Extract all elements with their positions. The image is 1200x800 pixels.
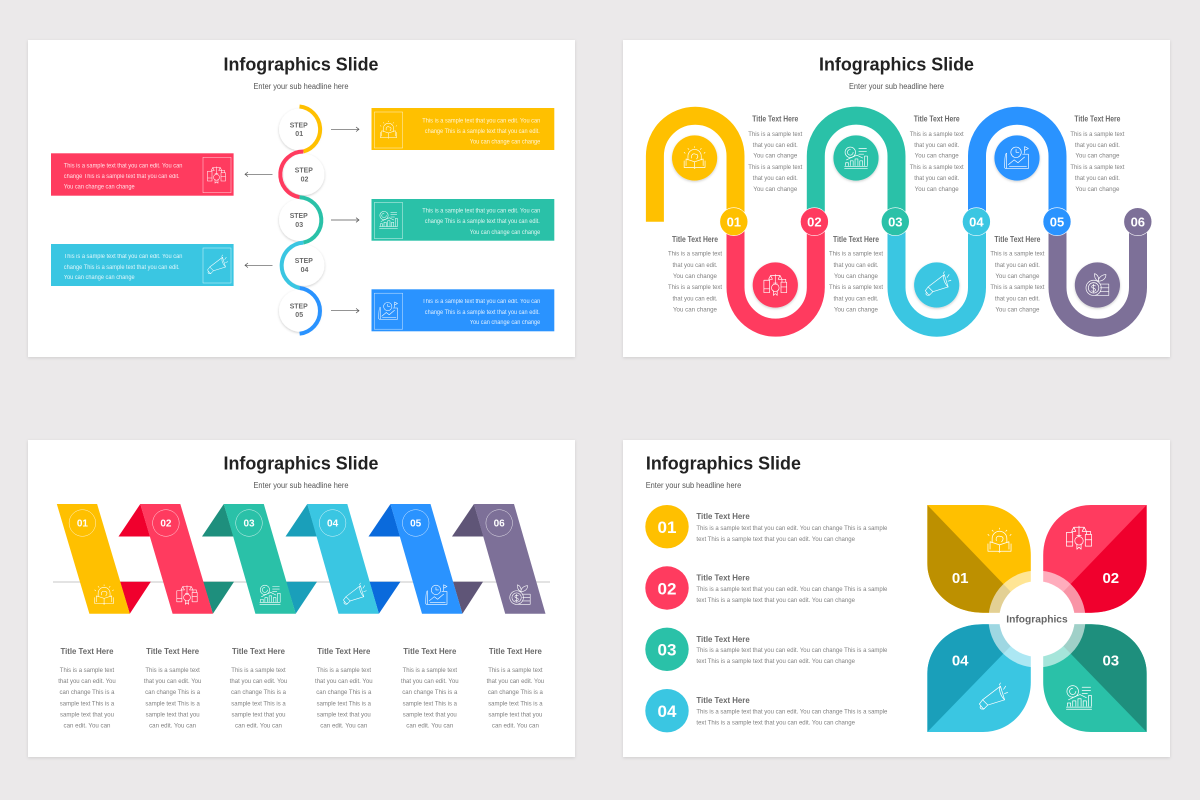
heading: ribbon panel title: Infographics Slide	[224, 453, 378, 474]
text block 03: that you can edit.	[834, 296, 879, 302]
text block 03: Title Text Here	[833, 235, 879, 244]
text block 05: Title Text Here	[994, 235, 1041, 244]
list item 02: This is a sample text that you can edit. You can change This is a sample	[696, 587, 888, 593]
text block 02: This is a sample text	[748, 132, 803, 138]
column text 03: Title Text Here	[232, 647, 286, 656]
box: step 03: This is a sample text that you can edit. You can	[422, 208, 540, 214]
baseline	[53, 581, 550, 583]
box: step 04: You can change can change	[64, 275, 135, 281]
list item 03	[645, 628, 888, 671]
column text 01: can edit. You can	[64, 723, 110, 729]
petal 02	[1043, 505, 1147, 613]
box: step 05	[372, 289, 554, 331]
box: step 01: This is a sample text that you can edit. You can	[422, 118, 540, 124]
column text 01: can change This is a	[60, 690, 115, 696]
text block 03: This is a sample text	[829, 251, 883, 257]
sub headline: serpentine panel: Enter your sub headline here	[849, 82, 945, 91]
text block 06: Title Text Here	[1074, 114, 1121, 124]
ribbon 03: 03	[243, 519, 255, 530]
petal 02: 02	[1102, 570, 1119, 587]
icon: map	[1005, 147, 1028, 168]
text block 06: that you can edit.	[1075, 176, 1120, 182]
list item 01	[645, 505, 888, 548]
text block 05: You can change	[995, 307, 1040, 313]
icon: law	[764, 275, 787, 295]
text block 05: This is a sample text	[990, 251, 1045, 257]
text block 04: You can change	[915, 153, 959, 159]
text block 05: You can change	[995, 274, 1040, 280]
text block 04: that you can edit.	[914, 176, 960, 182]
sub headline: petals panel: Enter your sub headline here	[646, 481, 742, 490]
text block 01: that you can edit.	[672, 296, 718, 302]
column text 04: Title Text Here	[317, 647, 371, 656]
petal 04	[927, 619, 1037, 732]
box: step 02: You can change can change	[64, 184, 135, 190]
list item 02: text This is a sample text that you can edit. You can change	[696, 598, 856, 604]
column text 02: sample text This is a	[145, 701, 200, 707]
step labels: STEP	[290, 304, 308, 310]
list item 03: Title Text Here	[696, 635, 750, 644]
column text 05: Title Text Here	[403, 647, 457, 656]
petal 04: 04	[952, 652, 969, 669]
text block 04: Title Text Here	[914, 114, 960, 124]
panel: ribbon columns	[28, 440, 575, 757]
panel: steps timeline	[28, 40, 575, 357]
list item 04: text This is a sample text that you can edit. You can change	[696, 720, 856, 726]
arrows	[245, 127, 359, 313]
column text 01: that you can edit. You	[58, 679, 116, 685]
box: step 03	[372, 199, 554, 241]
text block 01: This is a sample text	[668, 285, 722, 291]
column text 01	[58, 647, 116, 729]
step labels: 03	[295, 222, 303, 229]
column text 02: Title Text Here	[146, 647, 200, 656]
column text 06: can change This is a	[488, 690, 544, 696]
column text 03: sample text that you	[232, 712, 286, 718]
text block 03: You can change	[834, 274, 879, 280]
list item 01: Title Text Here	[696, 512, 750, 521]
text block 06: This is a sample text	[1070, 132, 1125, 138]
badge numbers: 04	[969, 214, 984, 229]
panel: serpentine path	[623, 40, 1170, 357]
badge numbers: 03	[888, 214, 903, 229]
column text 03	[230, 647, 287, 729]
list item 02: 02	[658, 579, 676, 598]
step labels: 01	[295, 131, 303, 138]
column text 02: can change This is a	[145, 690, 201, 696]
ribbon 02	[140, 504, 213, 614]
list item 04: Title Text Here	[696, 696, 750, 705]
column text 05: sample text that you	[403, 712, 457, 718]
column text 05	[401, 647, 459, 729]
text block 06: You can change	[1075, 153, 1120, 159]
sub headline: steps panel: Enter your sub headline here	[254, 82, 349, 91]
text block 06: This is a sample text	[1070, 165, 1125, 171]
text block 02	[748, 114, 803, 193]
column text 06	[487, 647, 544, 729]
column text 06: can edit. You can	[492, 723, 539, 729]
list item 01: text This is a sample text that you can edit. You can change	[696, 537, 856, 543]
column text 06: that you can edit. You	[487, 679, 544, 685]
icon: book	[684, 147, 705, 168]
text block 03: You can change	[834, 307, 879, 313]
box: step 02	[51, 153, 234, 196]
text block 02: You can change	[753, 187, 798, 193]
icon discs	[672, 135, 1120, 308]
step labels: 04	[301, 267, 308, 274]
ribbon 05: 05	[410, 519, 422, 530]
petal 01: 01	[952, 570, 969, 587]
box: step 01: change This is a sample text that you can edit.	[425, 129, 540, 135]
box: step 05: change This is a sample text that you can edit.	[425, 310, 540, 316]
serpentine track	[655, 116, 1138, 328]
text block 01: that you can edit.	[672, 263, 718, 269]
ribbon 06: 06	[494, 519, 505, 530]
box: step 02: This is a sample text that you can edit. You can	[64, 163, 182, 169]
box: step 02: change This is a sample text that you can edit.	[64, 174, 180, 180]
heading: steps panel title: Infographics Slide	[224, 54, 378, 74]
badge numbers: 06	[1131, 214, 1145, 229]
badge numbers	[727, 214, 1145, 229]
box: step 04	[51, 244, 234, 286]
column text 03: can edit. You can	[235, 723, 282, 729]
ribbon 04	[307, 504, 379, 614]
list item 02: Title Text Here	[696, 574, 750, 582]
text block 04: This is a sample text	[910, 132, 964, 138]
heading: petals panel title: Infographics Slide	[646, 453, 801, 474]
center hub	[994, 576, 1080, 662]
column text 01: sample text that you	[60, 712, 114, 718]
text block 03	[829, 235, 883, 313]
column text 04: can edit. You can	[320, 723, 367, 729]
text block 05	[990, 235, 1045, 313]
column text 03: can change This is a	[231, 690, 287, 696]
list item 02	[645, 566, 888, 610]
ribbon 02: 02	[160, 519, 172, 530]
text block 05: that you can edit.	[995, 263, 1040, 269]
column text 02: sample text that you	[146, 712, 200, 718]
text block 01: This is a sample text	[668, 251, 722, 257]
step labels: STEP	[290, 213, 308, 220]
badge numbers: 02	[807, 214, 822, 229]
box: step 03: You can change can change	[470, 230, 541, 236]
column text 02: can edit. You can	[149, 723, 196, 729]
text block 06: You can change	[1075, 187, 1120, 193]
text block 06: that you can edit.	[1075, 143, 1120, 149]
text block 01: You can change	[673, 307, 718, 313]
ribbon 05	[390, 504, 462, 614]
column text 06: Title Text Here	[489, 647, 542, 656]
column text 05: sample text This is a	[403, 701, 458, 707]
column text 06: sample text that you	[488, 712, 542, 718]
badge numbers: 01	[727, 214, 741, 229]
box: step 05: You can change can change	[470, 320, 541, 326]
column text 06: sample text This is a	[488, 701, 543, 707]
step labels	[290, 123, 313, 319]
step labels: 05	[295, 312, 303, 319]
sub headline: ribbon panel: Enter your sub headline here	[254, 481, 349, 490]
column text 04: sample text This is a	[317, 701, 372, 707]
list item 01: 01	[658, 518, 676, 537]
column text 01: Title Text Here	[60, 647, 114, 656]
step labels: STEP	[290, 123, 308, 130]
column text 03: that you can edit. You	[230, 679, 287, 685]
box: step 04: change This is a sample text that you can edit.	[64, 265, 180, 271]
heading: serpentine panel title: Infographics Slide	[819, 54, 974, 74]
box: step 04: This is a sample text that you can edit. You can	[64, 254, 182, 260]
column text 03: This is a sample text	[231, 668, 286, 674]
box: step 01	[372, 108, 554, 150]
text block 05: that you can edit.	[995, 296, 1040, 302]
column text 01: sample text This is a	[60, 701, 115, 707]
column text 04: that you can edit. You	[315, 679, 373, 685]
list item 04	[645, 689, 888, 732]
text block 04: You can change	[915, 187, 959, 193]
fold triangles	[118, 504, 484, 614]
text block 02: Title Text Here	[752, 114, 799, 124]
panel: petals	[623, 440, 1170, 757]
text block 04: that you can edit.	[914, 143, 960, 149]
column text 04: sample text that you	[317, 712, 371, 718]
column text 04	[315, 647, 373, 729]
text block 01: Title Text Here	[672, 235, 718, 244]
column text 05: can change This is a	[402, 690, 458, 696]
petal 01	[927, 505, 1031, 613]
text block 02: You can change	[753, 153, 798, 159]
step labels: 02	[301, 176, 308, 184]
box: step 01: You can change can change	[470, 139, 541, 145]
text block 02: that you can edit.	[753, 176, 798, 182]
ribbon 04: 04	[327, 519, 339, 530]
column text 02: This is a sample text	[145, 668, 200, 674]
list item 04: 04	[658, 702, 677, 721]
text block 01: You can change	[673, 274, 718, 280]
column text 06: This is a sample text	[488, 668, 543, 674]
text block 01	[668, 235, 722, 313]
column text 04: can change This is a	[316, 690, 372, 696]
text block 03: This is a sample text	[829, 285, 883, 291]
badge numbers: 05	[1050, 214, 1064, 229]
column text 02: that you can edit. You	[144, 679, 201, 685]
column text 05: can edit. You can	[406, 723, 453, 729]
petal 03	[1037, 619, 1147, 732]
text block 05: This is a sample text	[990, 285, 1045, 291]
step circles	[279, 108, 324, 332]
text block 06	[1070, 114, 1125, 193]
icon: megaphone	[925, 272, 951, 295]
icon: coins	[1086, 274, 1109, 295]
text block 02: This is a sample text	[748, 165, 803, 171]
column text 03: sample text This is a	[231, 701, 286, 707]
number badges	[720, 208, 1152, 236]
ribbon 06	[474, 504, 546, 614]
ribbon 01	[57, 504, 130, 614]
column text 04: This is a sample text	[317, 668, 371, 674]
icon: chart	[845, 147, 867, 168]
text block 03: that you can edit.	[834, 263, 879, 269]
step labels: STEP	[295, 168, 313, 175]
ribbon 01: 01	[77, 519, 88, 530]
step labels: STEP	[295, 258, 313, 265]
box: step 05: This is a sample text that you can edit. You can	[422, 299, 540, 305]
list item 01: This is a sample text that you can edit. You can change This is a sample	[696, 526, 888, 532]
ribbon 03	[224, 504, 296, 614]
list item 04: This is a sample text that you can edit. You can change This is a sample	[696, 709, 888, 715]
text block 04: This is a sample text	[910, 165, 964, 171]
list item 03: This is a sample text that you can edit. You can change This is a sample	[696, 648, 888, 654]
connecting arcs	[280, 106, 321, 334]
box: step 03: change This is a sample text that you can edit.	[425, 219, 540, 225]
column text 02	[144, 647, 201, 729]
petal 03: 03	[1102, 652, 1119, 669]
center hub: Infographics	[1006, 615, 1068, 626]
column text 05: that you can edit. You	[401, 679, 459, 685]
column text 01: This is a sample text	[60, 668, 115, 674]
list item 03: text This is a sample text that you can edit. You can change	[696, 659, 856, 665]
text block 02: that you can edit.	[753, 143, 798, 149]
list item 03: 03	[658, 641, 676, 660]
text block 04	[910, 114, 964, 193]
column text 05: This is a sample text	[403, 668, 457, 674]
